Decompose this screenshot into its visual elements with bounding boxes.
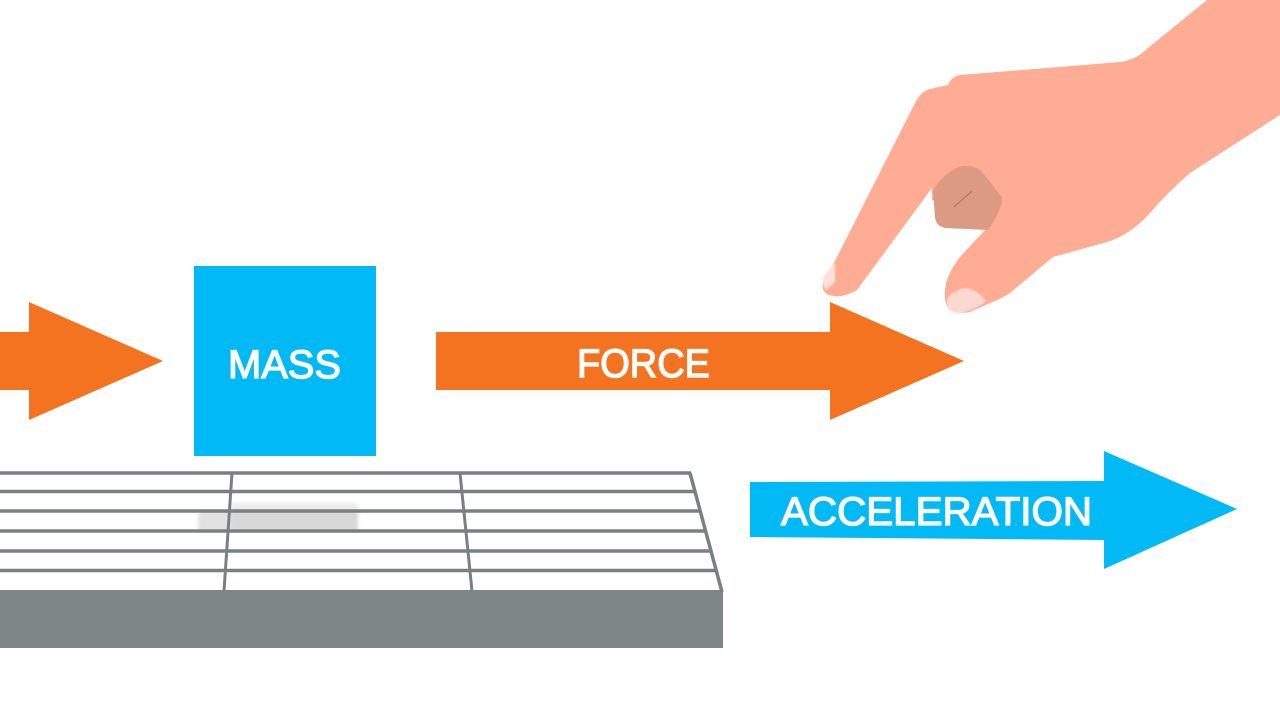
label: acceleration: ACCELERATION — [781, 490, 1092, 534]
arrow: incoming force at left — [0, 302, 163, 420]
hand silhouette — [823, 0, 1280, 313]
contact shadow of the mass — [198, 503, 358, 531]
arrow: acceleration — [750, 451, 1237, 569]
table front face — [0, 590, 723, 648]
icon: pointing hand — [823, 0, 1280, 313]
knuckle of folded finger — [933, 166, 1002, 230]
block: mass — [194, 266, 376, 456]
surface: grid table — [0, 473, 723, 648]
thumb nail — [947, 288, 986, 313]
label: force: FORCE — [577, 342, 710, 386]
label: mass: MASS — [228, 343, 341, 387]
grid lines — [0, 473, 722, 592]
index fingernail — [823, 262, 835, 290]
knuckle crease — [954, 191, 972, 207]
arrow: force — [436, 302, 964, 420]
